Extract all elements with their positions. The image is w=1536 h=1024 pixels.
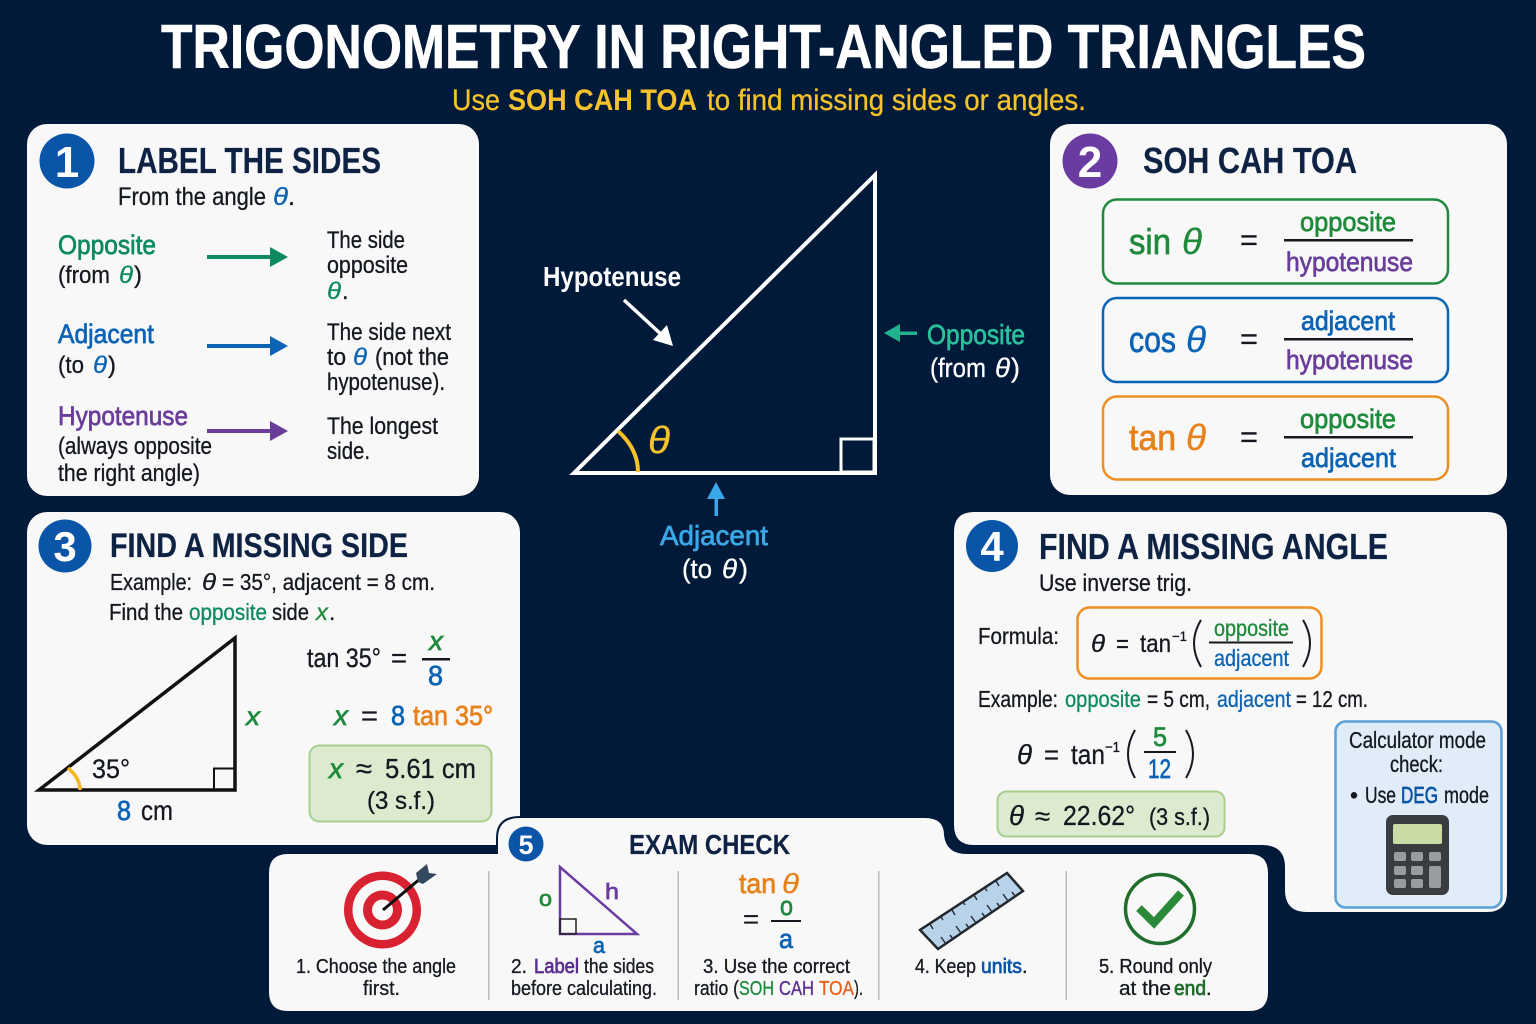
badge 5: 5	[518, 830, 534, 860]
formula: cosine: cos	[1129, 319, 1176, 360]
step 4 text: 4. Keep	[915, 956, 976, 978]
equation: tan 35 = x/8: =	[391, 643, 407, 673]
answer box: (3 s.f.)	[1149, 804, 1210, 831]
calculator mode box: mode	[1444, 782, 1489, 808]
example text: Example:	[110, 569, 192, 595]
badge 2	[1062, 134, 1118, 188]
formula box: −1	[1172, 628, 1187, 644]
adjacent label	[660, 520, 768, 584]
example text: = 12 cm.	[1296, 686, 1368, 712]
formula: tangent: =	[1240, 421, 1258, 454]
opposite label: (from	[58, 262, 110, 289]
formula box	[1078, 608, 1322, 678]
formula box: θ	[1091, 630, 1105, 658]
ratio formula: o	[780, 891, 793, 921]
adjacent definition	[327, 319, 451, 396]
equation: worked example: 12	[1148, 754, 1171, 784]
ratio formula: a	[779, 924, 794, 954]
example text: .	[329, 599, 335, 625]
opposite definition	[327, 227, 408, 305]
ratio formula	[739, 868, 801, 954]
example text: Example:	[978, 686, 1058, 712]
equation: tan 35 = x/8	[307, 626, 450, 691]
heading: find a missing angle: FIND A MISSING ANGLE	[1039, 526, 1388, 567]
subheading: .	[288, 183, 295, 211]
adjacent label	[58, 319, 154, 379]
equation: worked example: θ	[1017, 739, 1032, 770]
badge 3	[38, 520, 92, 572]
opposite label: (from	[930, 353, 986, 383]
ratio formula: tan	[739, 868, 776, 899]
opposite label	[58, 230, 156, 289]
subheading: Use inverse trig.	[1039, 570, 1192, 597]
icon: labelled triangle: a	[593, 933, 606, 958]
equation: worked example: tan	[1071, 739, 1105, 770]
calculator mode box: Use	[1365, 782, 1396, 808]
example text	[978, 686, 1368, 712]
arrow: adjacent	[207, 336, 288, 356]
triangle diagram: 8	[117, 795, 131, 826]
opposite label: Opposite	[58, 230, 156, 260]
triangle diagram: cm	[141, 795, 173, 826]
formula: cosine: adjacent	[1301, 306, 1395, 336]
panel 3: find a missing side	[27, 512, 520, 845]
formula box: opposite	[1214, 615, 1289, 641]
answer box: (3 s.f.)	[367, 787, 435, 815]
formula: tangent	[1103, 396, 1448, 480]
opposite label: θ	[119, 262, 133, 289]
formula: cosine: =	[1240, 323, 1258, 356]
formula: sine	[1103, 200, 1448, 284]
hypotenuse label: (always opposite	[58, 433, 212, 460]
opposite label	[927, 319, 1025, 383]
hypotenuse label: the right angle)	[58, 460, 200, 487]
step 3 text	[694, 956, 863, 1000]
formula: sine: opposite	[1300, 207, 1396, 237]
opposite definition: The side	[327, 227, 405, 254]
theta label: θ	[648, 420, 670, 462]
panel 2: soh cah toa	[1050, 124, 1507, 495]
panel 1: label the sides	[27, 124, 479, 496]
step 3 text: 3. Use the correct	[703, 956, 850, 978]
arrow: hypotenuse	[624, 300, 673, 346]
subtitle: to find missing sides or angles.	[707, 84, 1086, 117]
icon: labelled triangle: o	[539, 886, 552, 911]
icon: target with dart	[344, 864, 437, 948]
step 1 text: first.	[363, 978, 400, 1000]
answer box: 22.62°	[1063, 800, 1135, 831]
equation: worked example: =	[1044, 739, 1059, 770]
adjacent label: )	[739, 554, 748, 584]
formula: sine: sin	[1129, 221, 1171, 262]
example text: side	[272, 599, 309, 625]
equation: x = 8 tan 35: 8	[391, 700, 405, 731]
formula: sine: θ	[1182, 221, 1202, 262]
formula: tangent: θ	[1186, 417, 1206, 458]
badge 1: 1	[55, 138, 79, 187]
step 3 text: TOA	[819, 978, 855, 1000]
subtitle: SOH CAH TOA	[508, 84, 697, 117]
hypotenuse label: Hypotenuse	[543, 261, 681, 292]
heading: label the sides: LABEL THE SIDES	[118, 140, 381, 181]
subheading: From the angle	[118, 183, 266, 211]
ratio formula: θ	[782, 868, 799, 899]
formula: tangent: adjacent	[1301, 443, 1396, 473]
step 1 text: 1. Choose the angle	[296, 956, 456, 978]
central triangle diagram	[543, 175, 1025, 584]
formula: tangent: tan	[1129, 417, 1176, 458]
adjacent definition: θ	[353, 344, 367, 371]
step 5 text: 5. Round only	[1099, 956, 1212, 978]
angle arc	[618, 431, 638, 472]
answer box: 5.61 cm	[385, 753, 476, 784]
formula box: =	[1116, 630, 1129, 658]
answer box: x	[327, 753, 344, 784]
icon: ruler	[920, 873, 1023, 949]
icon: labelled triangle: h	[605, 879, 619, 904]
equation: x = 8 tan 35: =	[361, 700, 378, 731]
answer box	[998, 792, 1224, 836]
equation: x = 8 tan 35	[332, 700, 493, 731]
example text: opposite	[1065, 686, 1141, 712]
ratio formula: =	[743, 904, 759, 934]
badge 4: 4	[980, 523, 1004, 570]
example text	[109, 569, 435, 625]
heading: soh cah toa: SOH CAH TOA	[1143, 140, 1357, 181]
step 2 text: 2.	[511, 956, 527, 978]
heading: find a missing side: FIND A MISSING SIDE	[110, 527, 408, 565]
step 5 text: .	[1206, 978, 1212, 1000]
adjacent definition: (not the	[375, 344, 449, 371]
opposite definition: opposite	[327, 252, 408, 279]
formula: cosine: θ	[1186, 319, 1206, 360]
step 2 text: before calculating.	[511, 978, 657, 1000]
step 2 text	[511, 956, 657, 1000]
calculator mode box: Calculator mode	[1349, 727, 1486, 753]
opposite label: )	[1011, 353, 1020, 383]
step 5 text: at the	[1119, 978, 1171, 1000]
arrow: opposite	[884, 324, 917, 342]
triangle diagram	[39, 638, 261, 826]
example text: = 35°, adjacent = 8 cm.	[222, 569, 435, 595]
arrow: opposite	[207, 247, 288, 267]
opposite label: )	[134, 262, 142, 289]
badge 5	[508, 826, 544, 862]
calculator mode box: •	[1350, 782, 1358, 808]
right angle marker	[841, 439, 874, 472]
formula: tangent: opposite	[1300, 404, 1396, 434]
panel 5: exam check	[268, 817, 1269, 1012]
hypotenuse label	[58, 401, 212, 487]
adjacent definition: The side next	[327, 319, 451, 346]
example text: θ	[202, 569, 217, 595]
adjacent label: Adjacent	[58, 319, 154, 349]
step 1 text	[296, 956, 456, 1000]
answer box: ≈	[356, 753, 372, 784]
opposite definition: θ	[327, 278, 341, 305]
adjacent label: (to	[58, 352, 84, 379]
icon: labelled triangle	[539, 867, 637, 958]
subtitle	[452, 84, 1086, 117]
equation: worked example	[1017, 722, 1193, 784]
hypotenuse definition: The longest	[327, 413, 438, 440]
adjacent label: θ	[93, 352, 107, 379]
subheading: θ	[273, 183, 288, 211]
panel 4: find a missing angle	[954, 512, 1507, 912]
triangle diagram: x	[244, 701, 261, 731]
opposite definition: .	[342, 278, 349, 305]
step 3 text: CAH	[779, 978, 814, 1000]
step 3 text: ).	[854, 978, 863, 1000]
badge 2: 2	[1078, 138, 1102, 187]
hypotenuse definition: side.	[327, 438, 370, 465]
example text: opposite	[189, 599, 267, 625]
opposite label: θ	[995, 353, 1010, 383]
example text: x	[315, 599, 330, 625]
answer box	[310, 746, 492, 822]
opposite label: Opposite	[927, 319, 1025, 350]
adjacent label: (to	[682, 554, 712, 584]
adjacent definition: hypotenuse).	[327, 369, 445, 396]
equation: worked example: 5	[1153, 722, 1167, 752]
adjacent label: Adjacent	[660, 520, 768, 551]
step 2 text: the sides	[584, 956, 654, 978]
arrow: adjacent	[707, 482, 725, 516]
example text: = 5 cm,	[1147, 686, 1210, 712]
answer box: ≈	[1035, 801, 1050, 831]
calculator mode box	[1336, 722, 1502, 908]
equation: x = 8 tan 35: tan 35°	[413, 700, 493, 731]
equation: tan 35 = x/8: tan 35°	[307, 643, 381, 673]
formula: cosine	[1103, 298, 1448, 382]
hypotenuse definition	[327, 413, 438, 465]
calculator mode box: DEG	[1401, 782, 1438, 808]
icon: calculator	[1386, 815, 1449, 895]
adjacent label: θ	[722, 554, 737, 584]
arrow: hypotenuse	[207, 421, 288, 441]
calculator mode box: check:	[1390, 751, 1443, 777]
formula: sine: hypotenuse	[1286, 247, 1413, 277]
formula label: Formula:	[978, 623, 1059, 649]
equation: worked example: −1	[1105, 739, 1120, 756]
example text: adjacent	[1217, 686, 1292, 712]
triangle	[574, 175, 875, 473]
answer box: θ	[1009, 800, 1024, 831]
formula: cosine: hypotenuse	[1286, 345, 1413, 375]
step 5 text: end	[1174, 978, 1206, 1000]
step 4 text: units	[981, 956, 1022, 978]
step 4 text	[915, 956, 1028, 978]
step 3 text: ratio (	[694, 978, 739, 1000]
example text: Find the	[109, 599, 183, 625]
formula box: adjacent	[1214, 645, 1290, 671]
subtitle: Use	[452, 84, 500, 117]
step 3 text: SOH	[739, 978, 774, 1000]
badge 1	[40, 134, 94, 188]
adjacent definition: to	[327, 344, 346, 371]
badge 4	[966, 520, 1018, 572]
step 2 text: Label	[534, 956, 579, 978]
badge 3: 3	[53, 523, 77, 570]
hypotenuse label: Hypotenuse	[58, 401, 188, 431]
step 4 text: .	[1022, 956, 1028, 978]
equation: x = 8 tan 35: x	[332, 700, 349, 731]
adjacent label: )	[108, 352, 116, 379]
icon: check mark	[1126, 874, 1194, 944]
formula box: tan	[1140, 630, 1171, 658]
step 5 text	[1099, 956, 1212, 1000]
equation: tan 35 = x/8: x	[427, 626, 445, 656]
triangle diagram: 35°	[92, 754, 130, 784]
equation: tan 35 = x/8: 8	[428, 660, 443, 691]
formula: sine: =	[1240, 224, 1258, 257]
heading: exam check: EXAM CHECK	[629, 829, 790, 860]
